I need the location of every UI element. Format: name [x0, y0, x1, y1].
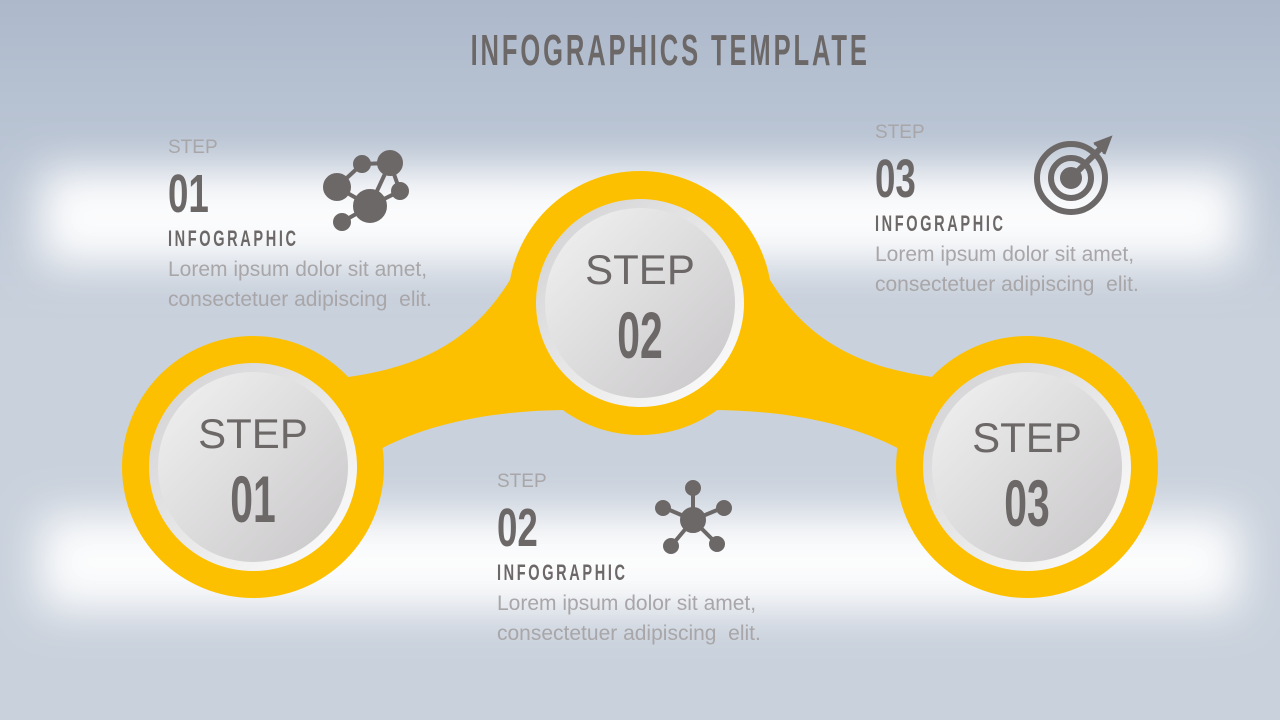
text block: step 01: INFOGRAPHIC — [168, 226, 299, 251]
text block: step 01: consectetuer adipiscing elit. — [168, 288, 432, 311]
text block: step 03: Lorem ipsum dolor sit amet, — [875, 243, 1134, 266]
step 02 disc: 02 — [617, 298, 663, 372]
text block: step 02: STEP — [497, 471, 547, 492]
icon: hub — [657, 482, 730, 552]
text block: step 03 — [875, 122, 1139, 296]
text block: step 02: INFOGRAPHIC — [497, 560, 628, 585]
step 01 disc: 01 — [230, 462, 276, 536]
text block: step 03: STEP — [875, 122, 925, 143]
text block: step 03: consectetuer adipiscing elit. — [875, 273, 1139, 296]
step 03 disc — [923, 363, 1131, 571]
step 01 disc: STEP — [198, 410, 308, 457]
step 02 disc: STEP — [585, 246, 695, 293]
title: INFOGRAPHICS TEMPLATE — [470, 26, 870, 75]
step 01 disc — [149, 363, 357, 571]
step 03 disc: 03 — [1004, 466, 1050, 540]
text block: step 02 — [497, 471, 761, 645]
text block: step 02: Lorem ipsum dolor sit amet, — [497, 592, 756, 615]
icon: target — [1037, 138, 1110, 212]
text block: step 01 — [168, 137, 432, 311]
text block: step 03: 03 — [875, 149, 916, 209]
text block: step 01: 01 — [168, 164, 209, 224]
step 02 disc — [536, 199, 744, 407]
step 03 disc: STEP — [972, 414, 1082, 461]
text block: step 02: 02 — [497, 498, 538, 558]
text block: step 01: Lorem ipsum dolor sit amet, — [168, 258, 427, 281]
icon: network people — [325, 152, 407, 229]
text block: step 02: consectetuer adipiscing elit. — [497, 622, 761, 645]
yellow shape — [122, 171, 1158, 598]
text block: step 03: INFOGRAPHIC — [875, 211, 1006, 236]
text block: step 01: STEP — [168, 137, 218, 158]
